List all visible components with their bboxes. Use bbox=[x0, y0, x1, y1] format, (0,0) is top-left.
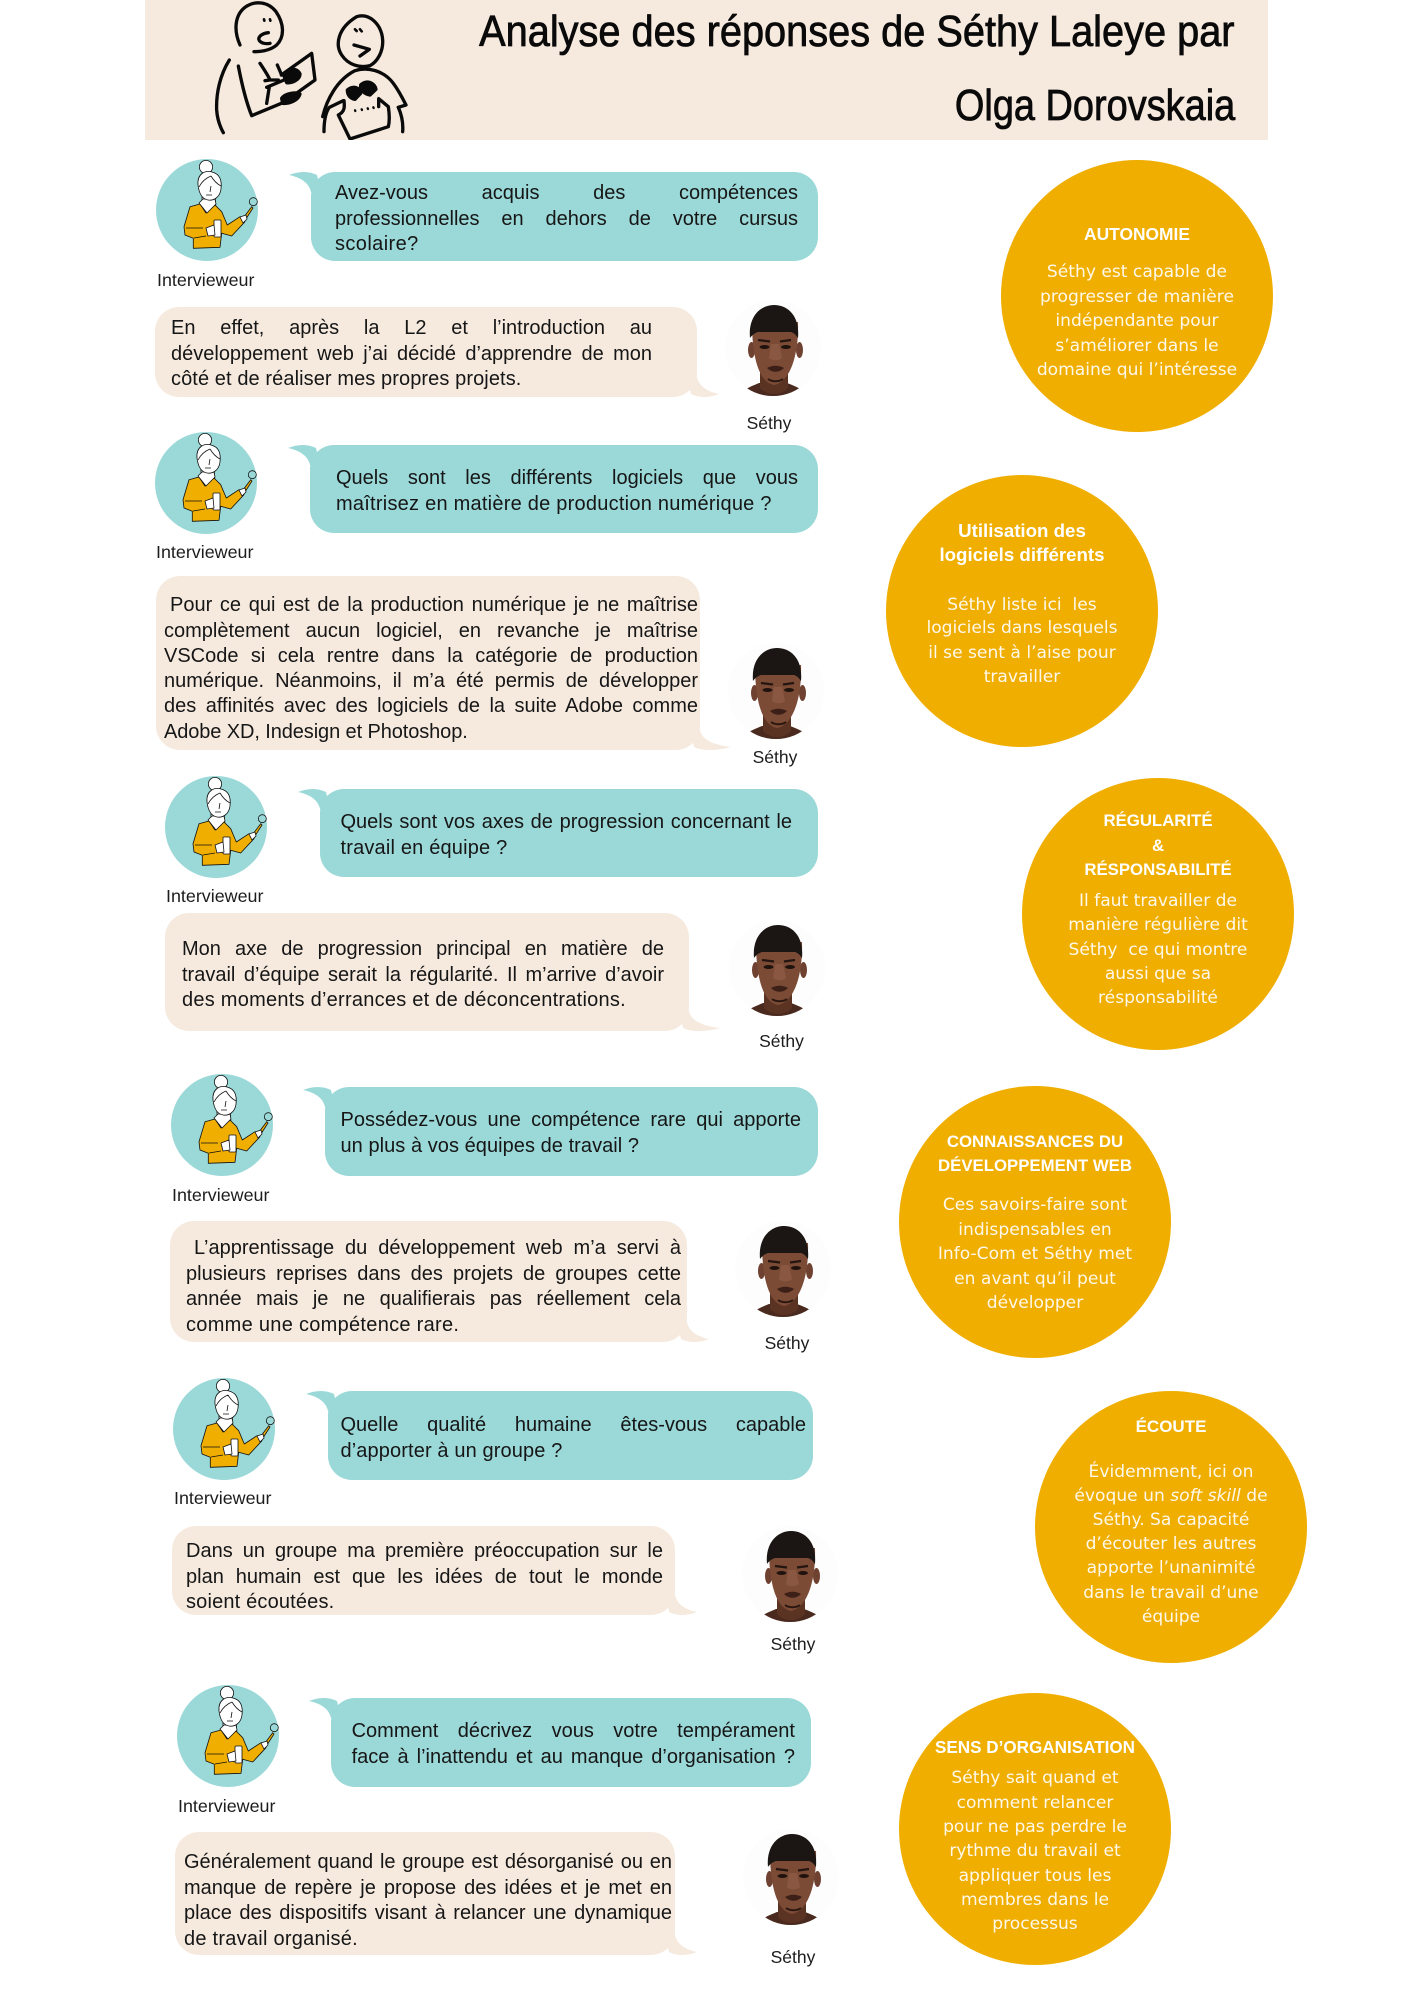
answer text 2: des affinités avec des logiciels de la suite Adobe comme bbox=[164, 695, 698, 717]
photo: Séthy 6 bbox=[765, 1834, 821, 1925]
callout circle: Utilisation des logiciels différents: travailler bbox=[984, 667, 1060, 687]
callout circle: Connaissances du développement web: en avant qu’il peut bbox=[954, 1269, 1116, 1289]
callout circle: Régularité et responsabilité: & bbox=[1152, 836, 1164, 855]
callout circle: Autonomie: Séthy est capable de bbox=[1047, 262, 1227, 282]
answer text 4: année mais je ne qualifierais pas réellement cela bbox=[186, 1288, 681, 1310]
answer text 2 bbox=[164, 594, 698, 743]
label: interviewer 4: Intervieweur bbox=[172, 1185, 269, 1205]
title line 1: Analyse des réponses de Séthy Laleye par bbox=[480, 6, 1235, 56]
question bubble 1 bbox=[289, 172, 818, 261]
question text 1: Avez-vous acquis des compétences bbox=[335, 182, 798, 204]
callout circle: Écoute: Séthy. Sa capacité bbox=[1093, 1510, 1249, 1530]
callout circle: Utilisation des logiciels différents bbox=[886, 475, 1158, 747]
answer bubble 5 bbox=[172, 1526, 696, 1615]
callout circle: Régularité et responsabilité: résponsabilité bbox=[1098, 988, 1218, 1008]
callout circle: Connaissances du développement web: Ces savoirs-faire sont bbox=[943, 1195, 1127, 1215]
callout circle: Écoute bbox=[1035, 1391, 1307, 1663]
title line 2: Olga Dorovskaia bbox=[955, 81, 1235, 130]
callout circle: Connaissances du développement web bbox=[899, 1086, 1171, 1358]
question text 1: scolaire? bbox=[335, 233, 419, 255]
question text 3: travail en équipe ? bbox=[340, 837, 507, 859]
icon: interviewer and interviewee sketch bbox=[214, 1, 408, 140]
question bubble 5 bbox=[306, 1391, 813, 1480]
answer text 3: des moments d’errances et de déconcentrations. bbox=[182, 989, 626, 1011]
callout circle: Régularité et responsabilité: aussi que sa bbox=[1105, 964, 1211, 984]
answer text 6: Généralement quand le groupe est désorganisé ou en bbox=[184, 1851, 672, 1873]
answer text 5: Dans un groupe ma première préoccupation sur le bbox=[186, 1540, 663, 1562]
callout circle: Écoute: d’écouter les autres bbox=[1086, 1534, 1256, 1554]
callout circle: Utilisation des logiciels différents: logiciels dans lesquels bbox=[926, 618, 1118, 638]
label: Séthy 1: Séthy bbox=[747, 413, 791, 433]
question bubble 4 bbox=[303, 1087, 818, 1176]
label: interviewer 1: Intervieweur bbox=[157, 270, 254, 290]
answer bubble 2 bbox=[156, 576, 730, 750]
callout circle: Utilisation des logiciels différents: Utilisation des bbox=[958, 520, 1086, 541]
answer text 1 bbox=[171, 317, 652, 390]
question bubble 2 bbox=[288, 445, 818, 533]
question text 2 bbox=[336, 467, 798, 515]
label: Séthy 6: Séthy bbox=[771, 1947, 815, 1967]
callout circle: Régularité et responsabilité: manière régulière dit bbox=[1068, 915, 1248, 935]
question bubble 6 bbox=[309, 1698, 811, 1787]
answer text 5 bbox=[186, 1540, 663, 1613]
question text 4: Possédez-vous une compétence rare qui apporte bbox=[340, 1109, 801, 1131]
answer text 6: manque de repère je propose des idées et je met en bbox=[184, 1877, 672, 1899]
answer text 1: développement web j’ai décidé d’apprendre de mon bbox=[171, 343, 652, 365]
answer text 4 bbox=[186, 1237, 681, 1336]
callout circle: Connaissances du développement web: indispensables en bbox=[958, 1220, 1112, 1240]
answer text 4: comme une compétence rare. bbox=[186, 1314, 459, 1336]
answer text 2: complètement aucun logiciel, en revanche je maîtrise bbox=[164, 620, 698, 642]
callout circle: Sens d'organisation: rythme du travail et bbox=[949, 1841, 1121, 1861]
answer text 5: plan humain est que les idées de tout le monde bbox=[186, 1566, 663, 1588]
question text 6: face à l’inattendu et au manque d’organisation ? bbox=[352, 1746, 795, 1768]
answer text 3: Mon axe de progression principal en matière de bbox=[182, 938, 664, 960]
callout circle: Écoute: ÉCOUTE bbox=[1136, 1417, 1206, 1436]
question text 3: Quels sont vos axes de progression concernant le bbox=[340, 811, 792, 833]
question text 1 bbox=[335, 182, 798, 255]
answer text 1: côté et de réaliser mes propres projets. bbox=[171, 368, 521, 390]
callout circle: Connaissances du développement web: CONNAISSANCES DU bbox=[947, 1132, 1123, 1151]
answer bubble 6 bbox=[175, 1832, 696, 1955]
answer text 4: plusieurs reprises dans des projets de groupes cette bbox=[186, 1263, 681, 1285]
label: interviewer 5: Intervieweur bbox=[174, 1488, 271, 1508]
callout circle: Connaissances du développement web: Info-Com et Séthy met bbox=[938, 1244, 1132, 1264]
photo: Séthy 4 bbox=[757, 1226, 813, 1317]
label: Séthy 3: Séthy bbox=[759, 1031, 804, 1051]
question text 6 bbox=[352, 1720, 795, 1768]
label: Séthy 2: Séthy bbox=[753, 747, 797, 767]
callout circle: Sens d'organisation: membres dans le bbox=[961, 1890, 1109, 1910]
label: interviewer 2: Intervieweur bbox=[156, 542, 253, 562]
callout circle: Régularité et responsabilité: Il faut travailler de bbox=[1079, 890, 1237, 910]
question bubble 3 bbox=[298, 789, 818, 877]
question text 2: Quels sont les différents logiciels que vous bbox=[336, 467, 798, 489]
icon: interviewer avatar 5 bbox=[173, 1378, 275, 1480]
label: interviewer 6: Intervieweur bbox=[178, 1796, 275, 1816]
callout circle: Sens d'organisation: SENS D’ORGANISATION bbox=[935, 1738, 1135, 1757]
label: interviewer 3: Intervieweur bbox=[166, 886, 263, 906]
answer text 6: place des dispositifs visant à relancer une dynamique bbox=[184, 1902, 672, 1924]
answer text 1: En effet, après la L2 et l’introduction au bbox=[171, 317, 652, 339]
question text 5: Quelle qualité humaine êtes-vous capable bbox=[340, 1414, 806, 1436]
answer text 5: soient écoutées. bbox=[186, 1591, 334, 1613]
callout circle: Connaissances du développement web: DÉVELOPPEMENT WEB bbox=[938, 1156, 1132, 1175]
callout circle: Sens d'organisation: appliquer tous les bbox=[959, 1866, 1111, 1886]
callout circle: Écoute: dans le travail d’une bbox=[1083, 1583, 1259, 1603]
answer bubble 1 bbox=[155, 307, 718, 397]
callout circle: Autonomie: domaine qui l’intéresse bbox=[1037, 360, 1237, 380]
answer text 6: de travail organisé. bbox=[184, 1928, 358, 1950]
answer text 6 bbox=[184, 1851, 672, 1950]
callout circle: Utilisation des logiciels différents: Séthy liste ici les bbox=[947, 595, 1097, 615]
callout circle: Écoute: Évidemment, ici on bbox=[1089, 1462, 1253, 1482]
question text 3 bbox=[340, 811, 792, 859]
label: Séthy 4: Séthy bbox=[765, 1333, 809, 1353]
callout circle: Écoute: évoque un soft skill de bbox=[1074, 1486, 1268, 1506]
answer text 2: Adobe XD, Indesign et Photoshop. bbox=[164, 721, 468, 743]
question text 5 bbox=[340, 1414, 806, 1462]
callout circle: Autonomie: s’améliorer dans le bbox=[1055, 336, 1219, 356]
callout circle: Sens d'organisation: comment relancer bbox=[957, 1793, 1113, 1813]
question text 4 bbox=[340, 1109, 801, 1157]
photo: Séthy 3 bbox=[751, 925, 807, 1016]
callout circle: Utilisation des logiciels différents: il se sent à l’aise pour bbox=[928, 643, 1116, 663]
header banner bbox=[145, 0, 1268, 140]
callout circle: Régularité et responsabilité bbox=[1022, 778, 1294, 1050]
photo: Séthy 5 bbox=[764, 1531, 820, 1622]
callout circle: Autonomie bbox=[1001, 160, 1273, 432]
callout circle: Régularité et responsabilité: RÉSPONSABILITÉ bbox=[1084, 860, 1232, 878]
answer bubble 4 bbox=[170, 1221, 708, 1342]
icon: interviewer avatar 3 bbox=[165, 776, 267, 878]
icon: interviewer avatar 6 bbox=[177, 1685, 279, 1787]
photo: Séthy 1 bbox=[747, 305, 803, 396]
question text 4: un plus à vos équipes de travail ? bbox=[340, 1135, 639, 1157]
callout circle: Sens d'organisation bbox=[899, 1693, 1171, 1965]
answer text 3: travail d’équipe serait la régularité. Il m’arrive d’avoir bbox=[182, 964, 664, 986]
callout circle: Écoute: apporte l’unanimité bbox=[1087, 1558, 1255, 1578]
icon: interviewer avatar 4 bbox=[171, 1074, 273, 1176]
label: Séthy 5: Séthy bbox=[771, 1634, 815, 1654]
callout circle: Utilisation des logiciels différents: logiciels différents bbox=[939, 544, 1105, 565]
answer text 4: L’apprentissage du développement web m’a servi à bbox=[194, 1237, 681, 1259]
answer text 2: Pour ce qui est de la production numérique je ne maîtrise bbox=[170, 594, 698, 616]
icon: interviewer avatar 2 bbox=[155, 432, 257, 534]
callout circle: Autonomie: AUTONOMIE bbox=[1084, 224, 1190, 244]
callout circle: Régularité et responsabilité: RÉGULARITÉ bbox=[1103, 811, 1213, 830]
callout circle: Sens d'organisation: pour ne pas perdre le bbox=[943, 1817, 1127, 1837]
question text 2: maîtrisez en matière de production numérique ? bbox=[336, 493, 772, 515]
question text 6: Comment décrivez vous votre tempérament bbox=[352, 1720, 795, 1742]
callout circle: Sens d'organisation: processus bbox=[992, 1914, 1078, 1934]
callout circle: Sens d'organisation: Séthy sait quand et bbox=[951, 1768, 1119, 1788]
icon: interviewer avatar 1 bbox=[156, 159, 258, 261]
question text 1: professionnelles en dehors de votre cursus bbox=[335, 208, 798, 230]
callout circle: Régularité et responsabilité: Séthy ce qui montre bbox=[1069, 940, 1247, 960]
question text 5: d’apporter à un groupe ? bbox=[340, 1440, 562, 1462]
callout circle: Autonomie: indépendante pour bbox=[1055, 311, 1219, 331]
callout circle: Écoute: équipe bbox=[1142, 1607, 1200, 1627]
callout circle: Autonomie: progresser de manière bbox=[1040, 286, 1234, 306]
answer text 2: numérique. Néanmoins, il m’a été permis de développer bbox=[164, 670, 698, 692]
answer bubble 3 bbox=[165, 913, 720, 1031]
answer text 3 bbox=[182, 938, 664, 1011]
callout circle: Connaissances du développement web: développer bbox=[987, 1293, 1083, 1313]
photo: Séthy 2 bbox=[750, 648, 806, 739]
answer text 2: VSCode si cela rentre dans la catégorie de production bbox=[164, 645, 698, 667]
